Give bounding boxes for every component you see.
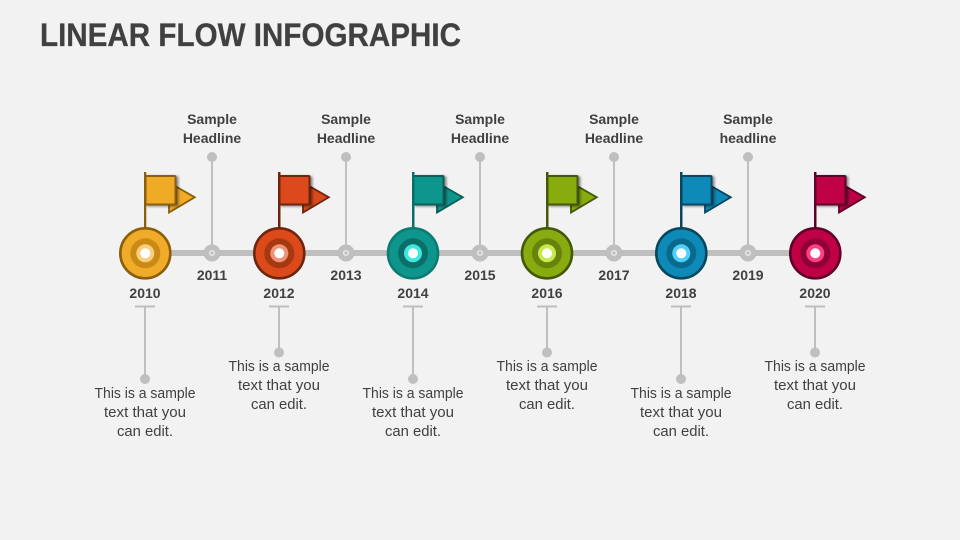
flag 2020 [814, 172, 865, 228]
connector 2018 [671, 306, 691, 379]
year 2017: 2017 [598, 267, 630, 283]
milestone 2020 [764, 172, 866, 413]
milestone 2018 [630, 172, 732, 440]
node 2018 [656, 228, 706, 278]
year 2014: 2014 [397, 285, 429, 301]
text 2014: This is a sample [362, 385, 464, 402]
title: LINEAR FLOW INFOGRAPHIC [40, 17, 461, 53]
text 2012: text that you [238, 377, 320, 394]
text 2014: text that you [372, 404, 454, 421]
text 2018: This is a sample [630, 385, 732, 402]
flag 2018 [680, 172, 731, 228]
node 2010 [120, 228, 170, 278]
text 2018: text that you [640, 404, 722, 421]
headline 2017: Sample [589, 111, 639, 127]
year 2019: 2019 [732, 267, 764, 283]
headline 2011: Sample [187, 111, 237, 127]
milestone 2019 [720, 111, 777, 283]
timeline bar [145, 250, 815, 256]
headline 2015: Headline [451, 130, 509, 146]
milestone 2016 [496, 172, 598, 413]
text 2010: This is a sample [94, 385, 196, 402]
text 2014: can edit. [385, 423, 441, 440]
headline 2015: Sample [455, 111, 505, 127]
headline 2011: Headline [183, 130, 241, 146]
milestone 2014 [362, 172, 464, 440]
connector 2012 [269, 306, 289, 352]
year 2020: 2020 [799, 285, 831, 301]
milestone 2017 [585, 111, 643, 283]
year 2018: 2018 [665, 285, 697, 301]
connector 2020 [805, 306, 825, 352]
text 2010: can edit. [117, 423, 173, 440]
text 2018: can edit. [653, 423, 709, 440]
text 2010: text that you [104, 404, 186, 421]
year 2013: 2013 [330, 267, 362, 283]
connector 2010 [135, 306, 155, 379]
flag 2012 [278, 172, 329, 228]
text 2012: This is a sample [228, 358, 330, 375]
headline 2017: Headline [585, 130, 643, 146]
headline 2019: headline [720, 130, 777, 146]
text 2016: can edit. [519, 396, 575, 413]
year 2010: 2010 [129, 285, 161, 301]
flag 2016 [546, 172, 597, 228]
milestone 2015 [451, 111, 509, 283]
node 2012 [254, 228, 304, 278]
node 2016 [522, 228, 572, 278]
headline 2019: Sample [723, 111, 773, 127]
milestone 2012 [228, 172, 330, 413]
year 2011: 2011 [197, 267, 227, 283]
year 2012: 2012 [263, 285, 295, 301]
node 2020 [790, 228, 840, 278]
text 2016: text that you [506, 377, 588, 394]
year 2015: 2015 [464, 267, 496, 283]
milestone 2013 [317, 111, 375, 283]
connector 2016 [537, 306, 557, 352]
headline 2013: Headline [317, 130, 375, 146]
flag 2014 [412, 172, 463, 228]
text 2020: text that you [774, 377, 856, 394]
connector 2014 [403, 306, 423, 379]
text 2020: can edit. [787, 396, 843, 413]
text 2012: can edit. [251, 396, 307, 413]
headline 2013: Sample [321, 111, 371, 127]
text 2020: This is a sample [764, 358, 866, 375]
milestone 2010 [94, 172, 196, 440]
text 2016: This is a sample [496, 358, 598, 375]
flag 2010 [144, 172, 195, 228]
node 2014 [388, 228, 438, 278]
year 2016: 2016 [531, 285, 563, 301]
milestone 2011 [183, 111, 241, 283]
